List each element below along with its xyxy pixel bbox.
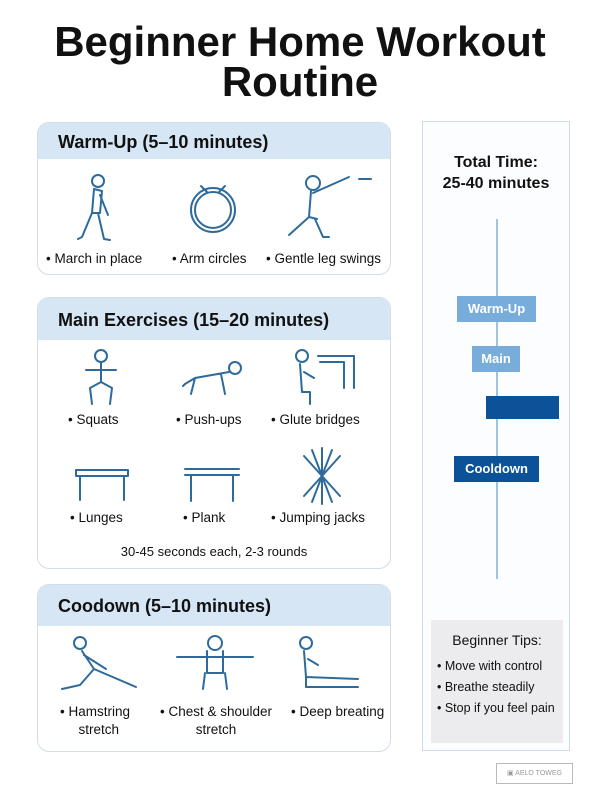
heading: total time: Total Time:: [454, 154, 538, 171]
heading: cooldown: Coodown (5–10 minutes): [58, 596, 271, 616]
bar: cooldown: [454, 456, 539, 482]
icon: lunges: [75, 469, 129, 501]
labels: • March in place: [46, 251, 142, 266]
panel: cooldown: stretch: [196, 722, 236, 737]
panel: main exercises: • Jumping jacks: [271, 510, 365, 525]
panel: cooldown: [37, 584, 391, 752]
bar: main: Main: [481, 351, 511, 366]
tips box: [431, 620, 563, 743]
icon: deep breathing: [299, 636, 359, 688]
labels: stretch: [78, 722, 119, 737]
logo: ▣ AELO TOWEG: [507, 770, 562, 777]
panel: warm-up: • Gentle leg swings: [266, 251, 381, 266]
panel: timeline: [422, 121, 570, 751]
tips box: • Breathe steadily: [437, 680, 534, 694]
icon: arm circles: [190, 185, 236, 233]
icon: push-ups: [182, 361, 242, 395]
bar: dark: [486, 396, 559, 419]
panel: cooldown: • Deep breating: [291, 704, 384, 719]
labels: • Hamstring: [60, 704, 130, 719]
panel: cooldown: • Chest & shoulder: [160, 704, 272, 719]
heading: cooldown: [38, 585, 390, 626]
panel: main exercises: • Glute bridges: [271, 412, 360, 427]
heading: main: Main Exercises (15–20 minutes): [58, 310, 329, 330]
icon: glute bridges: [295, 349, 355, 405]
heading: warm-up: [38, 123, 390, 159]
heading: main: [38, 298, 390, 340]
title: [54, 18, 546, 105]
panel: warm-up: [37, 122, 391, 275]
icon: jumping jacks: [303, 447, 341, 505]
logo: [496, 763, 573, 784]
icon: march: [77, 174, 111, 241]
heading: total time: [443, 154, 549, 192]
title: Routine: [222, 58, 378, 105]
bar: warm-up: [457, 296, 536, 322]
icon: plank: [184, 468, 240, 502]
bar: main: [472, 346, 520, 372]
icon: hamstring stretch: [61, 636, 137, 690]
panel: main exercises: • Push-ups: [176, 412, 242, 427]
panel: main exercises: [37, 297, 391, 569]
heading: warm-up: Warm-Up (5–10 minutes): [58, 132, 268, 152]
tips box: • Move with control: [437, 659, 542, 673]
bar: cooldown: Cooldown: [465, 461, 528, 476]
icon: squats: [85, 349, 117, 405]
icon: leg swing: [288, 175, 372, 238]
labels: [60, 704, 130, 737]
timeline line: [496, 219, 498, 579]
heading: total time: 25-40 minutes: [443, 175, 549, 192]
note: 30-45 seconds each, 2-3 rounds: [121, 544, 307, 559]
labels: • Squats: [68, 412, 119, 427]
panel: main exercises: • Plank: [183, 510, 225, 525]
tips box: Beginner Tips:: [452, 632, 542, 648]
panel: main exercises: • Lunges: [70, 510, 123, 525]
panel: warm-up: • Arm circles: [172, 251, 246, 266]
title: Beginner Home Workout: [54, 18, 546, 65]
tips box: • Stop if you feel pain: [437, 701, 555, 715]
bar: warm-up: Warm-Up: [468, 301, 525, 316]
icon: chest stretch: [176, 635, 254, 690]
